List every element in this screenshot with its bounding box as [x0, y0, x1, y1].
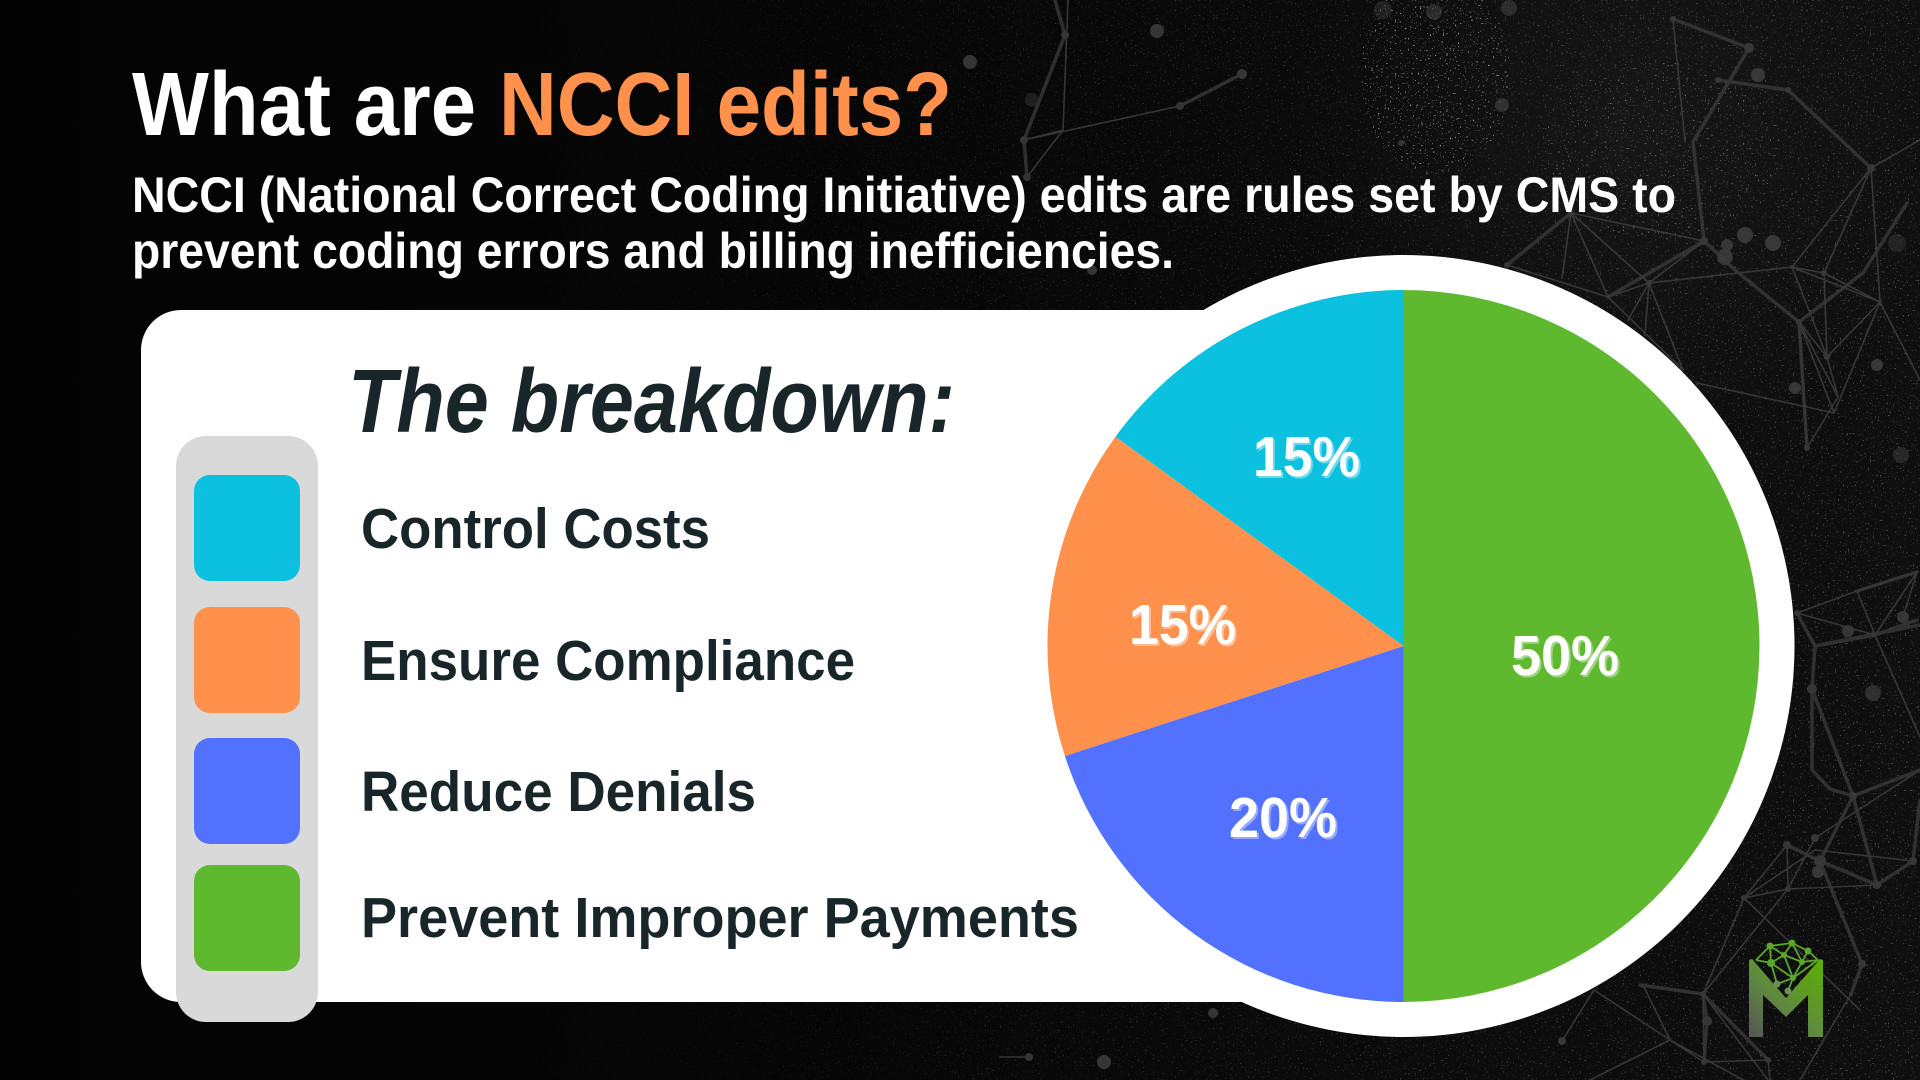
legend labels — [361, 497, 1079, 950]
slice: ensure compliance 15% — [1047, 437, 1404, 756]
icon: M logo — [1749, 940, 1823, 1037]
panel: breakdown card — [141, 310, 1281, 1002]
percent labels: 50% — [1511, 624, 1619, 688]
percent labels: 15% — [1253, 425, 1360, 489]
legend labels: Reduce Denials — [361, 760, 756, 824]
subtitle — [132, 167, 1676, 279]
legend labels: Ensure Compliance — [361, 629, 855, 693]
percent labels: 15% — [1129, 593, 1236, 657]
slice: prevent improper payments 50% — [1404, 290, 1760, 1002]
swatch: prevent improper payments — [194, 865, 300, 971]
swatch: control costs — [194, 475, 300, 581]
heading: the breakdown: The breakdown: — [348, 352, 955, 452]
legend bar — [176, 436, 318, 1022]
pie chart — [1012, 255, 1794, 1037]
slice: control costs 15% — [1116, 290, 1404, 646]
swatch: ensure compliance — [194, 607, 300, 713]
slice: reduce denials 20% — [1065, 646, 1404, 1002]
title: What are — [132, 55, 476, 155]
subtitle: prevent coding errors and billing inefficiencies. — [132, 223, 1174, 279]
percent labels: 20% — [1229, 786, 1337, 850]
legend labels: Control Costs — [361, 497, 710, 561]
background — [608, 0, 1920, 1080]
subtitle: NCCI (National Correct Coding Initiative) edits are rules set by CMS to — [132, 167, 1676, 223]
title — [132, 55, 952, 155]
percent labels — [1129, 425, 1619, 850]
legend labels: Prevent Improper Payments — [361, 886, 1079, 950]
swatch: reduce denials — [194, 738, 300, 844]
title: NCCI edits? — [499, 55, 952, 155]
